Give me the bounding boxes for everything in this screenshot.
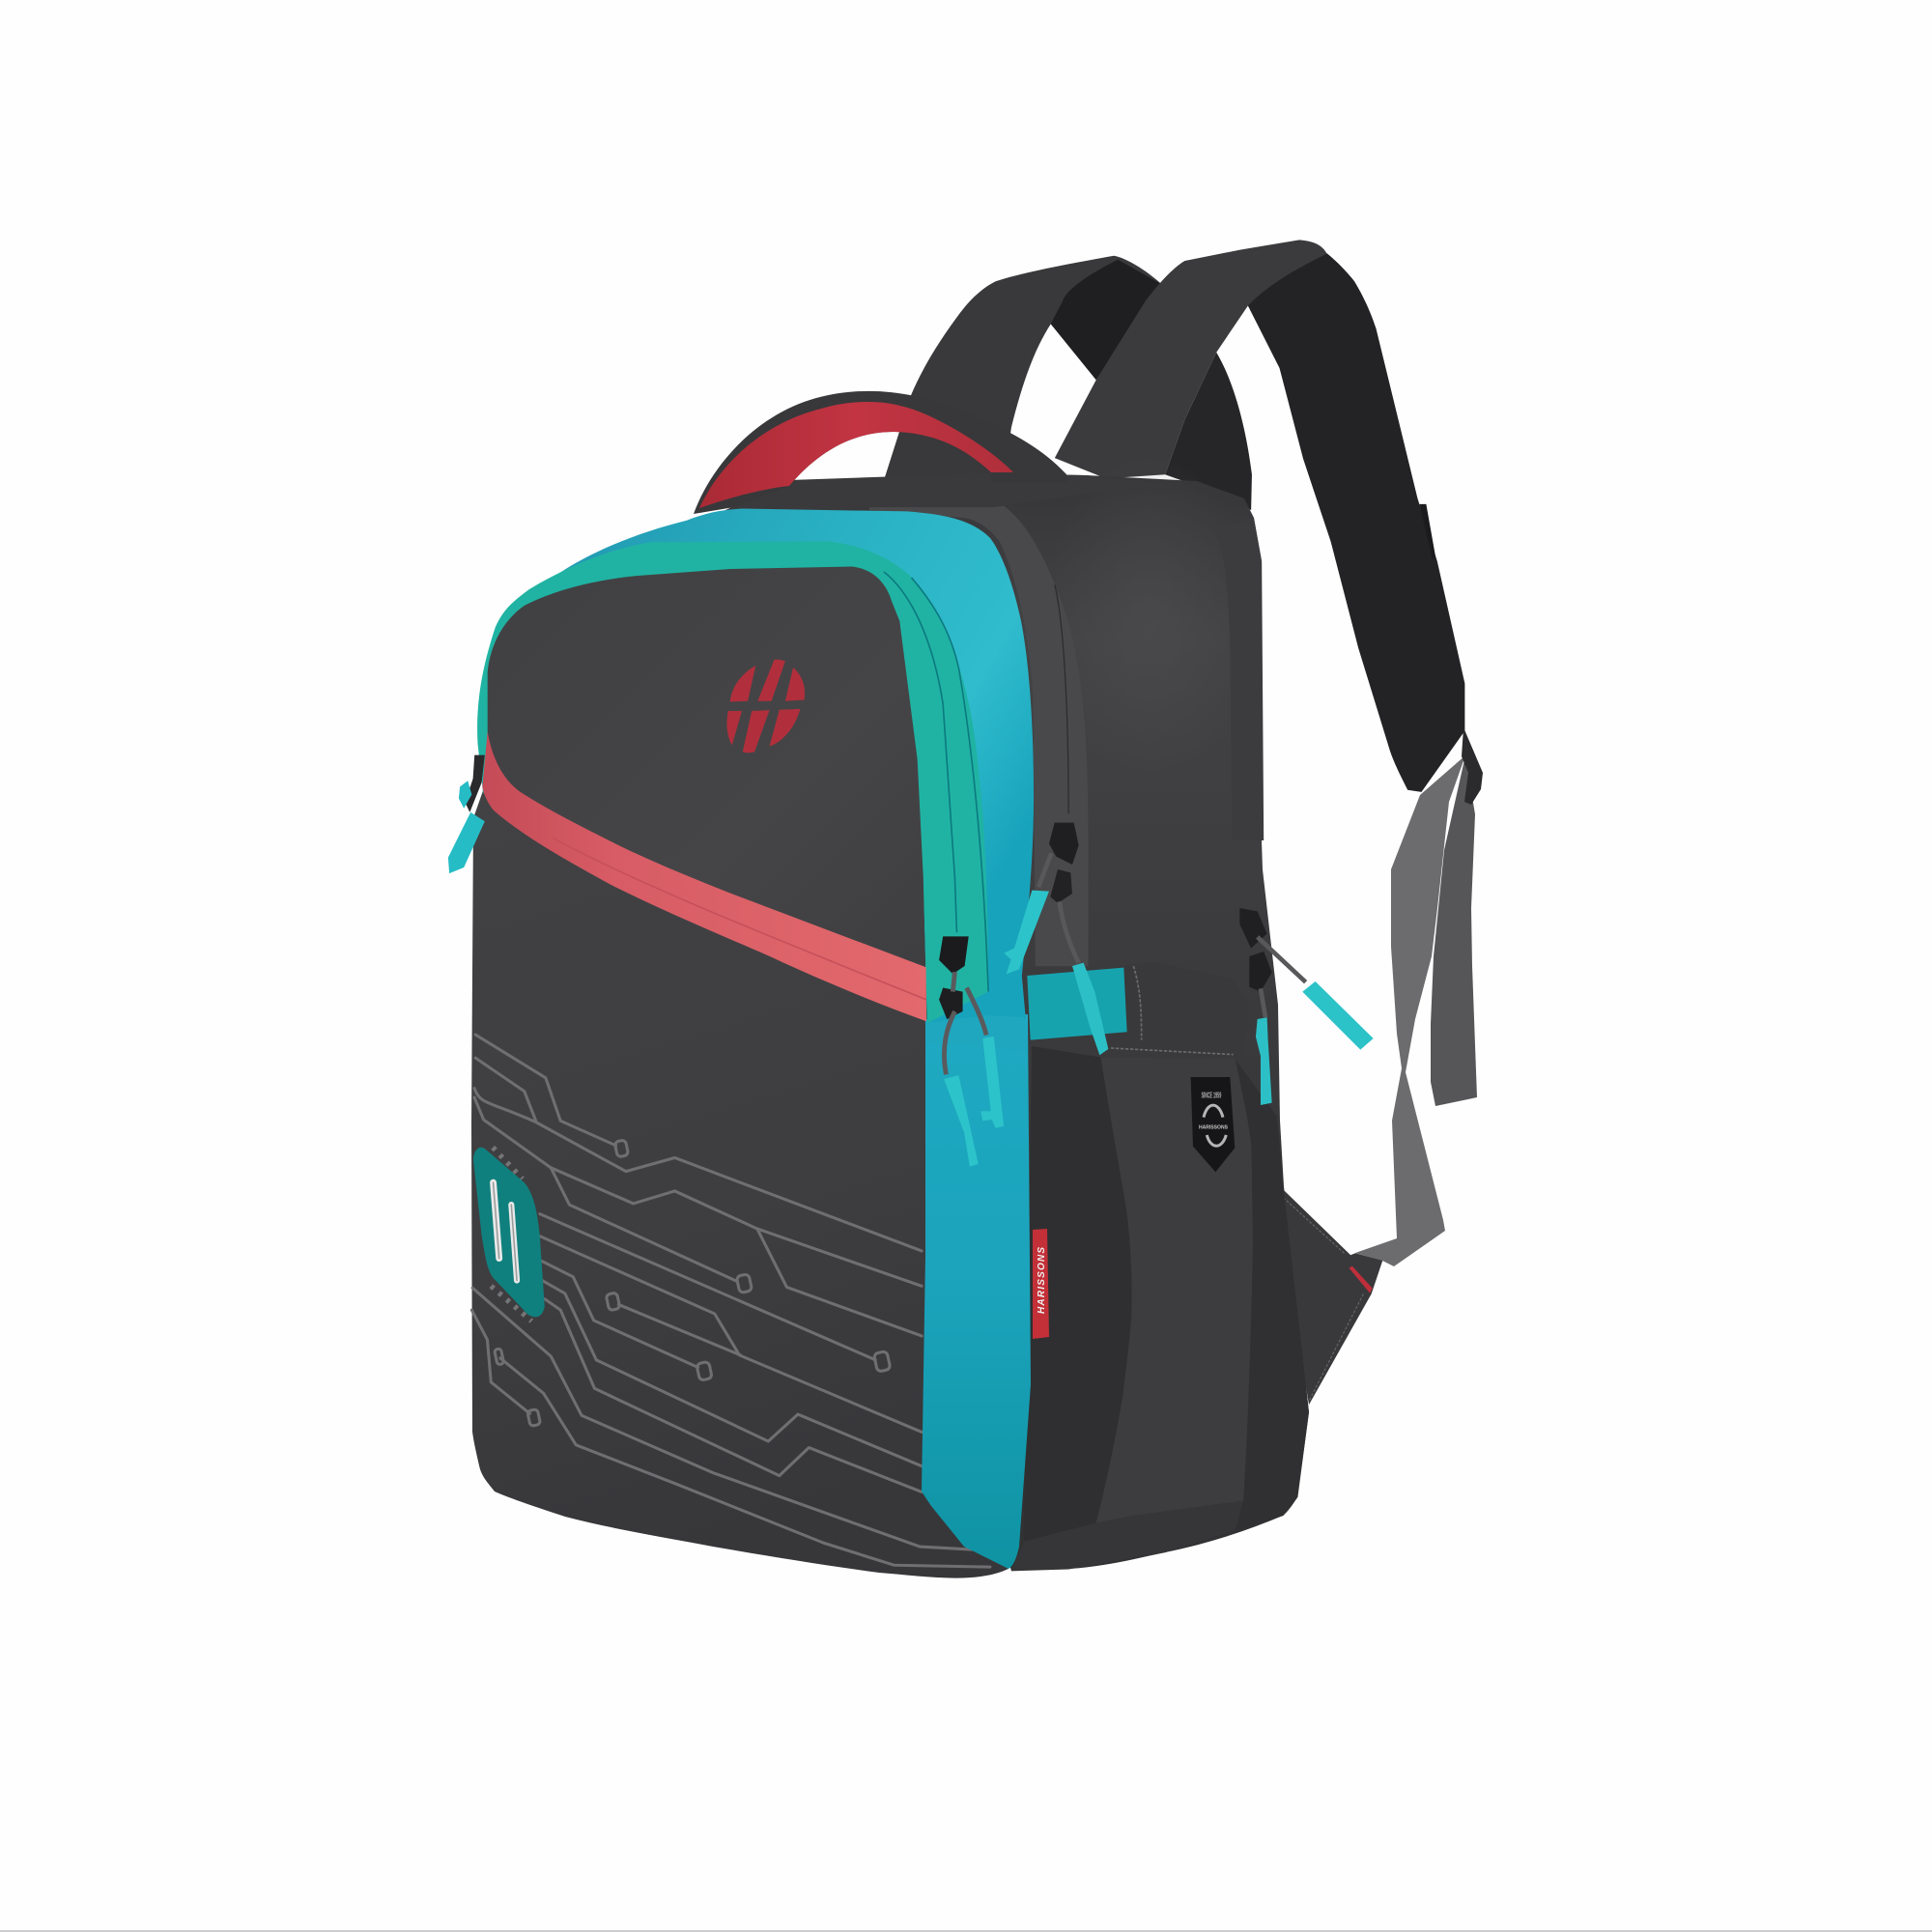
teal webbing lower overlap [925,1015,1028,1051]
upper side pull [1004,891,1049,974]
wing red tag [1349,1266,1373,1293]
front lower body [471,763,1009,1578]
circuit print [471,1035,990,1567]
front strap band [1055,240,1327,478]
grey webbing strap front strip [1355,755,1465,1266]
shield badge: HARISSONS [1199,1125,1228,1131]
shield badge [1191,1077,1235,1172]
base [1011,1501,1243,1571]
grab handle [694,391,1066,514]
rear wing and pockets [1011,1046,1382,1571]
rear strap pad [1165,353,1252,510]
lower right pull [1256,1017,1272,1105]
bottom edge line [0,1930,1932,1932]
red side label [1033,1229,1049,1339]
lower teal panel [922,1014,1031,1569]
green zipper band [477,541,988,1023]
wing stitching [1283,1198,1363,1401]
front side pocket [1096,1057,1253,1523]
rear side panel [1236,1059,1309,1530]
upper pocket and webbing back [1108,963,1249,1056]
embroidered logo [726,660,805,753]
side highlight [1043,454,1256,782]
shoulder straps [883,240,1464,792]
right side pull [1302,981,1374,1050]
left zipper pull [448,755,485,873]
front strap pad [1248,241,1464,792]
front zipper sliders [939,936,986,1074]
grey webbing strap rear strip [1431,755,1477,1106]
red side label: HARISSONS [1037,1246,1047,1314]
front zipper pulls [944,1037,1004,1167]
upper pocket face [488,567,926,996]
front upper panels [448,509,1034,1074]
webbing pull [1072,963,1108,1055]
teal webbing loop [1027,968,1127,1040]
rear bottom wing [1280,1186,1382,1405]
coral zip line [553,838,926,1000]
teal 10 patch [473,1148,545,1321]
shield badge: SINCE 1959 [1202,1092,1222,1100]
side zip sliders [1049,823,1079,865]
rear shoulder strap [883,256,1162,482]
zipper seam lines [884,572,988,992]
top teal gusset [533,509,1034,1023]
left side dark panel [1024,1046,1132,1542]
coral pocket zipper [482,731,926,1021]
top band [691,473,1159,526]
strap buckle [1462,727,1483,805]
side panel [789,473,1309,1571]
side zipper pulls and shield badge [1004,823,1374,1172]
grey zipper seam [869,495,1264,966]
strap side tab [1419,504,1435,559]
